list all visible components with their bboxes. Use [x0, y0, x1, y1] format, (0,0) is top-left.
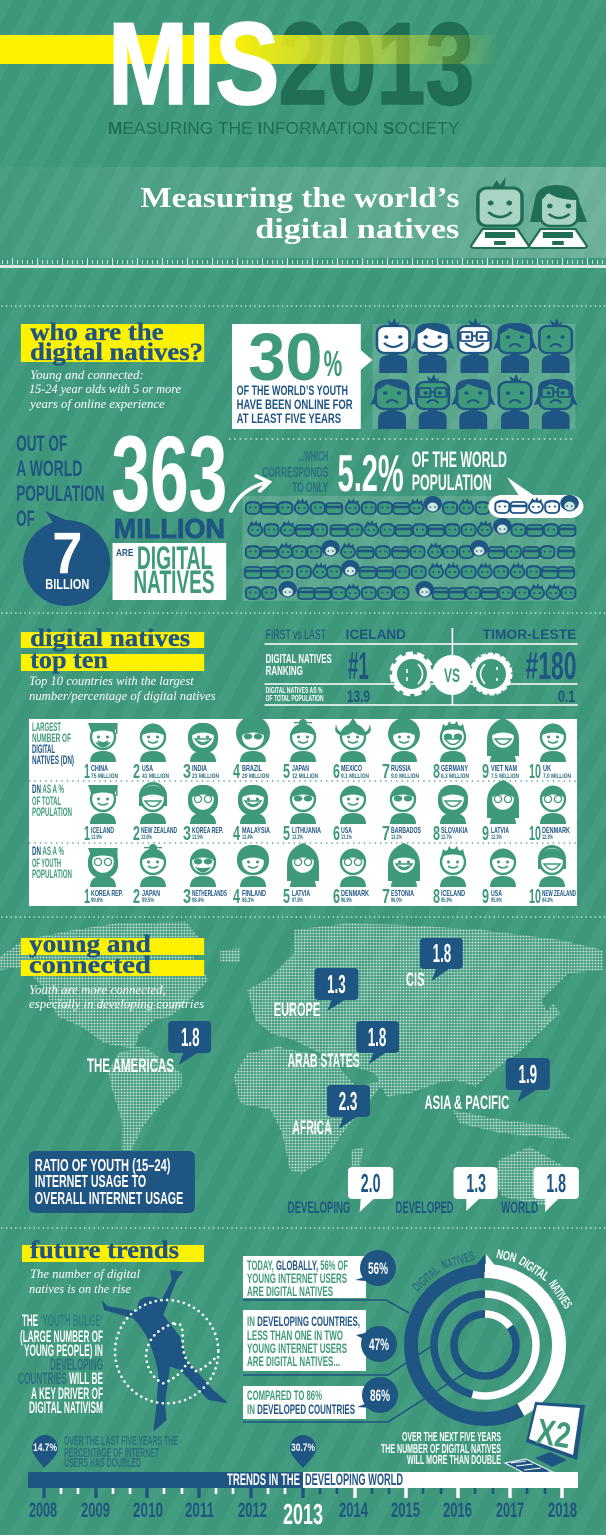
- row: largest number of digital natives: 7.5 MILLION: [491, 774, 519, 780]
- timeline: trends in the developing world: [28, 1470, 578, 1531]
- text: over the last five years: [64, 1433, 178, 1470]
- row: digital natives as a percent of youth population: 5: [283, 886, 290, 908]
- row: digital natives as a percent of youth population: ICELAND: [441, 888, 465, 898]
- label: digital natives: DIGITAL: [409, 1263, 442, 1294]
- panel: who are the digital natives: TO ONLY: [292, 479, 328, 496]
- title: MIS 2013 logo: [0, 0, 499, 139]
- callout: 47 percent: [243, 1310, 430, 1375]
- row: digital natives as a percent of total population: 13.9%: [91, 835, 102, 841]
- row: largest number of digital natives: 23 MILLION: [192, 774, 219, 780]
- row: digital natives as a percent of total population: 13.6%: [141, 835, 152, 841]
- row: digital natives as a percent of youth population: KOREA REP.: [91, 888, 123, 898]
- row: digital natives as a percent of youth population: JAPAN: [142, 888, 160, 898]
- panel: who are the digital natives: OF THE WORLD: [412, 448, 507, 473]
- text: youth bulge: THE ‘YOUTH BULGE’: [22, 1312, 103, 1330]
- row: largest number of digital natives: VIET NAM: [491, 763, 517, 773]
- text: which corresponds to only: [262, 448, 328, 496]
- text: youth bulge: [18, 1312, 103, 1417]
- callout: Africa: [292, 1085, 370, 1139]
- row: largest number of digital natives: GERMANY: [441, 763, 468, 773]
- row: digital natives as a percent of youth population: 3: [183, 886, 191, 908]
- comparison table: Iceland vs Timor-Leste: FIRST vs LAST: [266, 627, 326, 643]
- text: out of a world population of: OUT OF: [16, 432, 67, 457]
- callout: 30 percent: OF THE WORLD’S YOUTH: [237, 383, 348, 399]
- callout: are digital natives: ARE: [116, 548, 133, 559]
- callout: 86 percent: [243, 1373, 465, 1422]
- heading: digital natives: [30, 624, 190, 652]
- callout: 14.7 percent: [32, 1435, 58, 1468]
- description: [29, 983, 205, 1012]
- callout: developed: DEVELOPED: [396, 1197, 454, 1217]
- year labels: 2012: [238, 1499, 267, 1522]
- row: digital natives as a percent of total population: MALAYSIA: [242, 825, 270, 835]
- callout: 30.7 percent: 30.7%: [291, 1442, 315, 1454]
- text: out of a world population of: A WORLD: [16, 457, 82, 482]
- heading: digital natives?: [30, 338, 203, 366]
- callout: developing: 2.0: [361, 1169, 380, 1198]
- text: youth bulge: DIGITAL NATIVISM: [29, 1399, 103, 1417]
- row: largest number of digital natives: 8: [433, 761, 440, 783]
- row: digital natives as a percent of total population: 13.2%: [292, 835, 303, 841]
- row labels: DN AS A %: [32, 846, 64, 858]
- panel: digital natives top ten: [21, 624, 578, 908]
- logo strapline: MEASURING THE INFORMATION SOCIETY: [108, 118, 459, 139]
- callout: Arab States: [288, 1021, 399, 1072]
- row: largest number of digital natives: JAPAN: [292, 763, 309, 773]
- row: largest number of digital natives: 3: [183, 761, 191, 783]
- description: Top 10 countries with the largest: [29, 674, 195, 689]
- callout: world: WORLD: [501, 1197, 538, 1217]
- row labels: OF YOUTH: [32, 858, 61, 870]
- heading: [21, 930, 204, 979]
- callout: Europe: EUROPE: [274, 999, 320, 1021]
- row: digital natives as a percent of youth population: 98.4%: [192, 898, 204, 904]
- row: digital natives as a percent of youth population: 10: [529, 886, 541, 908]
- logo letters MIS: MIS: [108, 0, 280, 129]
- row: largest number of digital natives: INDIA: [192, 763, 207, 773]
- heading: top ten: [30, 646, 108, 674]
- callout: 30 percent: %: [324, 345, 342, 384]
- callout: CIS: [406, 938, 463, 991]
- row labels: OF TOTAL: [32, 796, 61, 808]
- timeline ticks: [44, 1488, 562, 1498]
- icon: jumping silhouette with dotted circles: [102, 1270, 228, 1432]
- panel: who are the digital natives: 5.2%: [338, 444, 404, 502]
- callout: 47 percent: LESS THAN ONE IN TWO: [247, 1327, 343, 1343]
- callout: 14.7 percent: 14.7%: [33, 1442, 57, 1454]
- icon: boy at laptop: [471, 177, 529, 248]
- row: digital natives as a percent of total population: LATVIA: [491, 825, 509, 835]
- row: largest number of digital natives: MEXICO: [341, 763, 362, 773]
- row: digital natives as a percent of total population: BARBADOS: [391, 825, 421, 835]
- row: digital natives as a percent of total population: 13.1%: [341, 835, 352, 841]
- icon: computer with X2: X2: [534, 1410, 574, 1456]
- row: largest number of digital natives: 9: [482, 761, 489, 783]
- row: largest number of digital natives: 9.0 MILLION: [391, 774, 419, 780]
- callout: developing: [288, 1167, 393, 1217]
- row: digital natives as a percent of total population: 10: [529, 823, 541, 845]
- year labels: 2011: [185, 1499, 214, 1522]
- panel: future trends: (LARGE NUMBER OF: [20, 1328, 103, 1346]
- row: digital natives as a percent of youth population: 96.0%: [391, 898, 402, 904]
- comparison table: Iceland vs Timor-Leste: #1: [348, 644, 369, 687]
- callout: developed: [396, 1167, 498, 1217]
- dotted world map: [0, 922, 603, 1207]
- row: digital natives as a percent of total population: 4: [233, 823, 241, 845]
- row: largest number of digital natives: 75 MILLION: [91, 774, 118, 780]
- year labels: 2009: [81, 1499, 110, 1522]
- text: out of a world population of: POPULATION: [16, 482, 104, 507]
- row: largest number of digital natives: 8.3 MILLION: [441, 774, 469, 780]
- timeline: trends in the developing world: TRENDS IN THE: [227, 1470, 300, 1489]
- text: over the last five years: PERCENTAGE OF INTERNET: [64, 1445, 159, 1460]
- description: [29, 1266, 140, 1296]
- comparison table: Iceland vs Timor-Leste: ICELAND: [346, 627, 406, 643]
- row: digital natives as a percent of youth population: 8: [433, 886, 440, 908]
- row: digital natives as a percent of total population: 12.7%: [441, 835, 452, 841]
- row labels: POPULATION: [32, 869, 72, 881]
- row: digital natives as a percent of youth population: 94.8%: [542, 898, 553, 904]
- comparison table: Iceland vs Timor-Leste: RANKING: [266, 663, 303, 678]
- callout: 30 percent: 30: [248, 320, 322, 395]
- year labels: 2018: [548, 1499, 577, 1522]
- row labels: [32, 722, 74, 881]
- panel: who are the digital natives: CORRESPONDS: [262, 464, 328, 481]
- callout: 86 percent: COMPARED TO 86%: [247, 1387, 322, 1403]
- row: largest number of digital natives: 10: [529, 761, 541, 783]
- panel: future trends: [18, 1237, 585, 1531]
- speech pill with highlighted faces: [488, 477, 583, 518]
- comparison table: Iceland vs Timor-Leste: 13.9: [347, 686, 370, 706]
- row: digital natives as a percent of youth population: 95.9%: [441, 898, 452, 904]
- callout: 56 percent: 56%: [368, 1259, 388, 1278]
- logo number 2013: 2013: [278, 0, 474, 129]
- row: largest number of digital natives: 6: [333, 761, 340, 783]
- panel: future trends: DEVELOPING: [50, 1356, 103, 1374]
- callout: 7 billion circle: [23, 511, 110, 606]
- callout: Arab States: ARAB STATES: [288, 1050, 360, 1072]
- row labels: POPULATION: [32, 807, 72, 819]
- callout: world: 1.8: [546, 1169, 566, 1198]
- row: digital natives as a percent of total population: KOREA REP.: [192, 825, 223, 835]
- row: digital natives as a percent of total population: 13.4%: [242, 835, 253, 841]
- callout: 30 percent: AT LEAST FIVE YEARS: [237, 411, 341, 427]
- row: digital natives as a percent of total population: 2: [133, 823, 140, 845]
- row: largest number of digital natives: UK: [543, 763, 552, 773]
- year labels: 2017: [496, 1499, 524, 1522]
- year labels: 2016: [443, 1499, 472, 1522]
- row: digital natives as a percent of youth population: LATVIA: [292, 888, 310, 898]
- year labels: 2015: [391, 1499, 420, 1522]
- crowd of faces: [242, 477, 583, 601]
- callout: 56 percent: ARE DIGITAL NATIVES: [247, 1283, 333, 1299]
- legend: ratio of youth internet usage: RATIO OF YOUTH (15–24): [35, 1155, 171, 1176]
- label: non digital natives: DIGITAL: [516, 1253, 552, 1284]
- panel: who are the digital natives: [16, 318, 583, 606]
- callout: 7 billion circle: BILLION: [45, 576, 89, 593]
- callout: Europe: 1.3: [327, 970, 346, 999]
- row: largest number of digital natives: 7: [382, 761, 390, 783]
- label: digital natives: [409, 1248, 477, 1294]
- big number: 363 million: [111, 413, 227, 544]
- description: [29, 674, 216, 704]
- callout: world: [501, 1167, 579, 1217]
- heading: young and: [29, 930, 151, 958]
- text: out of a world population of: [16, 432, 104, 532]
- row labels: DN AS A %: [32, 784, 64, 796]
- panel: young and connected: [0, 922, 603, 1217]
- heading: who are the: [30, 318, 164, 346]
- big number: 363 million: 363: [111, 413, 227, 534]
- row: digital natives as a percent of total population: 13.5%: [192, 835, 203, 841]
- arrow: curved arrow to 5.2 percent: [231, 476, 269, 511]
- row: digital natives as a percent of youth population: 95.6%: [491, 898, 502, 904]
- row: digital natives as a percent of youth population: 97.8%: [292, 898, 303, 904]
- panel: who are the digital natives: ...WHICH: [298, 448, 328, 465]
- timeline: trends in the developing world: DEVELOPING WORLD: [305, 1470, 403, 1489]
- callout: Asia and Pacific: ASIA & PACIFIC: [425, 1092, 509, 1114]
- year labels: [29, 1499, 577, 1531]
- description: The number of digital: [30, 1266, 140, 1281]
- callout: 30 percent: HAVE BEEN ONLINE FOR: [237, 397, 353, 413]
- banner: measuring the world's digital natives: digital natives: [255, 213, 460, 244]
- callout: Asia and Pacific: [425, 1058, 550, 1114]
- row: digital natives as a percent of total population: DENMARK: [542, 825, 571, 835]
- row: digital natives as a percent of youth population: 7: [382, 886, 390, 908]
- row: digital natives as a percent of youth population: ESTONIA: [391, 888, 414, 898]
- row: digital natives as a percent of youth population: 9: [482, 886, 489, 908]
- callout: are digital natives: DIGITAL: [137, 541, 212, 576]
- row: digital natives as a percent of total population: 12.3%: [542, 835, 553, 841]
- row: digital natives as a percent of total population: NEW ZEALAND: [141, 825, 177, 835]
- yellow band: [0, 35, 499, 64]
- legend: ratio of youth internet usage: OVERALL INTERNET USAGE: [35, 1188, 183, 1209]
- panel: future trends: YOUNG PEOPLE) IN: [24, 1342, 103, 1360]
- comparison table: Iceland vs Timor-Leste: DIGITAL NATIVES: [266, 651, 332, 666]
- row: largest number of digital natives: CHINA: [91, 763, 108, 773]
- banner background: [0, 167, 606, 258]
- row: digital natives as a percent of total population: 5: [283, 823, 290, 845]
- year labels: 2014: [339, 1499, 368, 1522]
- big number: 363 million: MILLION: [114, 514, 225, 544]
- row: largest number of digital natives: 1: [84, 761, 90, 783]
- row: digital natives as a percent of youth population: 4: [233, 886, 241, 908]
- callout: The Americas: THE AMERICAS: [87, 1055, 174, 1077]
- description: years of online experience: [28, 397, 165, 412]
- description: especially in developing countries: [29, 997, 205, 1012]
- row: largest number of digital natives: 5: [283, 761, 290, 783]
- callout: 86 percent: 86%: [370, 1386, 390, 1405]
- description: Youth are more connected,: [29, 983, 166, 998]
- callout: 47 percent: 47%: [369, 1335, 389, 1354]
- label: non digital natives: NON: [495, 1246, 518, 1265]
- text: out of a world population of: OF: [16, 507, 35, 532]
- row: digital natives as a percent of youth population: NEW ZEALAND: [542, 888, 576, 898]
- row: digital natives as a percent of total population: SLOVAKIA: [441, 825, 468, 835]
- row: largest number of digital natives: 9.1 MILLION: [341, 774, 369, 780]
- callout: are digital natives: [113, 541, 226, 600]
- comparison table: Iceland vs Timor-Leste: DIGITAL NATIVES AS %: [266, 686, 323, 695]
- description: Young and connected:: [30, 368, 144, 383]
- label: non digital natives: NATIVES: [546, 1277, 576, 1311]
- legend: ratio of youth internet usage: [29, 1151, 195, 1213]
- callout: developed: 1.3: [466, 1169, 486, 1198]
- row: digital natives as a percent of youth population: NETHERLANDS: [192, 888, 227, 898]
- row labels: NATIVES (DN): [32, 755, 74, 767]
- row: digital natives as a percent of total population: 1: [84, 823, 90, 845]
- row: largest number of digital natives: 4: [233, 761, 241, 783]
- comparison table: Iceland vs Timor-Leste: 0.1: [558, 686, 575, 706]
- row: largest number of digital natives: USA: [142, 763, 153, 773]
- heading: future trends: [30, 1237, 179, 1264]
- row: digital natives as a percent of youth population: FINLAND: [242, 888, 266, 898]
- row: largest number of digital natives: 41 MILLION: [142, 774, 169, 780]
- row: digital natives as a percent of youth population: 99.5%: [142, 898, 154, 904]
- year labels: 2008: [29, 1499, 57, 1522]
- row: digital natives as a percent of total population: 6: [333, 823, 340, 845]
- comparison table: Iceland vs Timor-Leste: OF TOTAL POPULATION: [266, 694, 324, 703]
- callout: 56 percent: YOUNG INTERNET USERS: [247, 1270, 347, 1286]
- labels and callouts over the map: [21, 930, 579, 1217]
- description: number/percentage of digital natives: [29, 689, 216, 704]
- callout: 30.7 percent: [290, 1435, 316, 1468]
- row: largest number of digital natives: [84, 716, 571, 783]
- row: digital natives as a percent of total population: ICELAND: [91, 825, 114, 835]
- row: largest number of digital natives: 20 MILLION: [242, 774, 269, 780]
- row: digital natives as a percent of youth population: [84, 843, 576, 908]
- description: natives is on the rise: [29, 1281, 131, 1296]
- table: top ten countries: [29, 716, 577, 908]
- row: digital natives as a percent of total population: 13.1%: [391, 835, 402, 841]
- callout: 56 percent: [243, 1250, 409, 1313]
- callout: developing: DEVELOPING: [288, 1197, 350, 1217]
- callout: The Americas: 1.8: [181, 1023, 200, 1052]
- callout: 30 percent: [232, 320, 372, 429]
- row: largest number of digital natives: BRAZIL: [242, 763, 262, 773]
- row: largest number of digital natives: 2: [133, 761, 140, 783]
- row labels: LARGEST: [32, 722, 61, 734]
- text: over the next five years: OVER THE NEXT FIVE YEARS: [402, 1429, 501, 1444]
- text: over the next five years: WILL MORE THAN DOUBLE: [407, 1452, 501, 1467]
- year labels: 2013: [283, 1499, 323, 1531]
- heading: [21, 318, 204, 366]
- callout: are digital natives: NATIVES: [133, 565, 215, 600]
- callout: Africa: 2.3: [339, 1087, 357, 1116]
- row: digital natives as a percent of total population: 12.3%: [491, 835, 502, 841]
- row: largest number of digital natives: 12 MILLION: [292, 774, 318, 780]
- callout: CIS: 1.8: [433, 939, 451, 968]
- callout: 47 percent: ARE DIGITAL NATIVES...: [247, 1353, 340, 1369]
- callout: Arab States: 1.8: [368, 1023, 386, 1052]
- text: youth bulge: COUNTRIES WILL BE: [18, 1370, 103, 1388]
- callout: Europe: [274, 968, 358, 1021]
- row labels: NUMBER OF: [32, 733, 71, 745]
- callout: CIS: CIS: [406, 969, 425, 991]
- row: largest number of digital natives: 7.0 MILLION: [543, 774, 571, 780]
- row: largest number of digital natives: RUSSIA: [391, 763, 411, 773]
- text: youth bulge: A KEY DRIVER OF: [31, 1385, 103, 1403]
- callout: 56 percent: TODAY, GLOBALLY, 56% OF: [247, 1257, 348, 1273]
- chart: concentric donut digital vs non digital natives: [409, 1246, 576, 1419]
- row: digital natives as a percent of youth population: DENMARK: [341, 888, 370, 898]
- legend: ratio of youth internet usage: INTERNET USAGE TO: [35, 1171, 146, 1192]
- icon: sad gear face vs smiling face: [392, 654, 511, 695]
- text: of the world population: [412, 448, 507, 496]
- description: 15-24 year olds with 5 or more: [29, 382, 181, 397]
- row labels: DIGITAL: [32, 744, 55, 756]
- row: digital natives as a percent of youth population: USA: [491, 888, 502, 898]
- callout: 47 percent: YOUNG INTERNET USERS: [247, 1340, 347, 1356]
- text: over the last five years: USERS HAS DOUBLED: [64, 1455, 141, 1470]
- row: digital natives as a percent of total population: [84, 780, 571, 845]
- row: digital natives as a percent of youth population: 6: [333, 886, 340, 908]
- row: digital natives as a percent of youth population: 96.9%: [341, 898, 352, 904]
- row: digital natives as a percent of youth population: 1: [84, 886, 90, 908]
- row: digital natives as a percent of total population: USA: [341, 825, 352, 835]
- comparison table: Iceland vs Timor-Leste: TIMOR-LESTE: [483, 627, 577, 643]
- row: digital natives as a percent of total population: LITHUANIA: [292, 825, 321, 835]
- heading: [21, 624, 204, 674]
- label: non digital natives: [495, 1246, 576, 1311]
- row: digital natives as a percent of total population: 3: [183, 823, 191, 845]
- icon: computer with X2: [505, 1402, 585, 1484]
- callout: 47 percent: IN DEVELOPING COUNTRIES,: [247, 1313, 360, 1329]
- banner: measuring the world's digital natives: [0, 167, 606, 258]
- callout: The Americas: [87, 1021, 211, 1077]
- banner heading: Measuring the world’s: [140, 182, 460, 213]
- text: over the next five years: THE NUMBER OF DIGITAL NATIVES: [381, 1441, 501, 1456]
- row: digital natives as a percent of total population: 8: [433, 823, 440, 845]
- description: [28, 368, 181, 412]
- row: digital natives as a percent of youth population: 98.3%: [242, 898, 254, 904]
- row: digital natives as a percent of total population: 7: [382, 823, 390, 845]
- icon: sad gear face vs smiling face: VS: [444, 666, 460, 687]
- comparison table: Iceland vs Timor-Leste: [264, 627, 578, 706]
- year labels: 2010: [133, 1499, 163, 1522]
- callout: 7 billion circle: 7: [52, 521, 82, 586]
- row: digital natives as a percent of total population: 9: [482, 823, 489, 845]
- callout: 86 percent: IN DEVELOPED COUNTRIES: [247, 1401, 355, 1417]
- text: over the last five years: OVER THE LAST FIVE YEARS THE: [64, 1433, 178, 1448]
- faces grid: 3 in 10 youth online: [370, 318, 578, 429]
- row: digital natives as a percent of youth population: 99.6%: [91, 898, 103, 904]
- label: digital natives: NATIVES: [440, 1248, 477, 1273]
- heading: connected: [29, 951, 151, 979]
- text: over the next five years: [381, 1429, 501, 1467]
- row: digital natives as a percent of youth population: 2: [133, 886, 140, 908]
- callout: Asia and Pacific: 1.9: [519, 1060, 537, 1089]
- text: of the world population: POPULATION: [412, 471, 492, 496]
- icon: girl at laptop: [529, 185, 587, 248]
- callout: Africa: AFRICA: [292, 1117, 332, 1139]
